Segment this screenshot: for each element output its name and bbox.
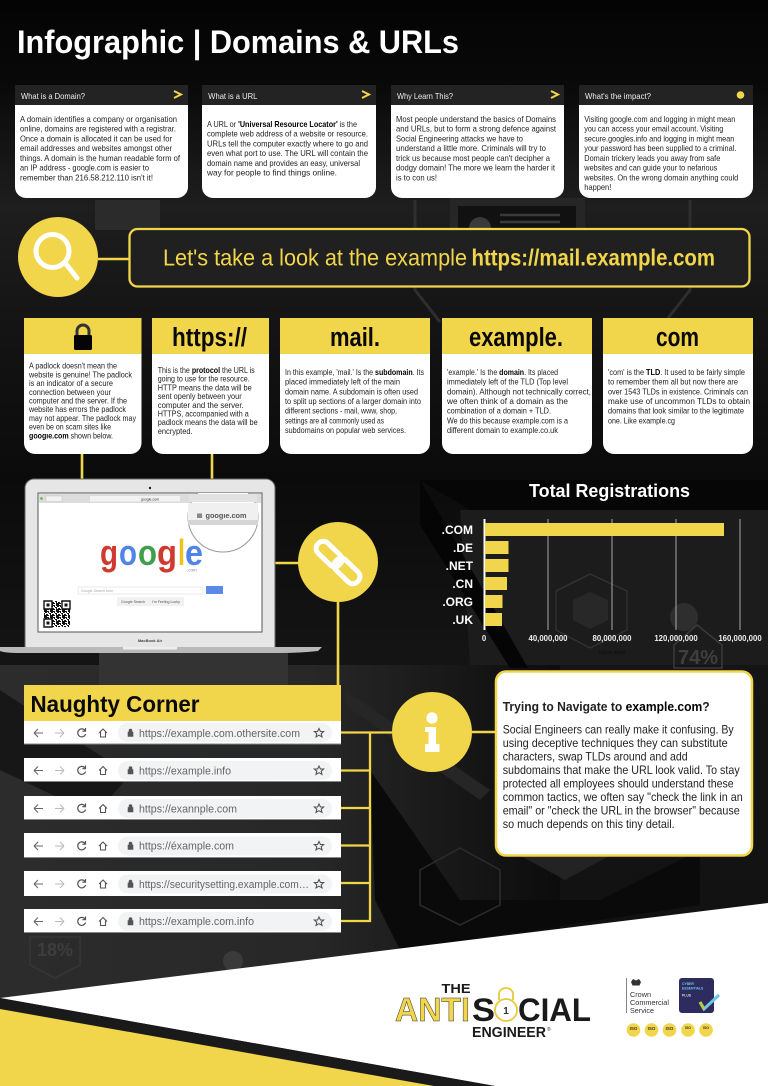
background: 18%: [37, 940, 73, 960]
panel: com TLD: over 1543 TLDs in existence. Criminals can: [608, 387, 748, 396]
bar chart: total registrations: 40,000,000: [528, 634, 568, 643]
heading: naughty corner: [24, 685, 341, 721]
logo: crown commercial service: [626, 978, 669, 1015]
panel: what is a domain: What is a Domain?: [21, 91, 85, 101]
google lookalike logo: o: [138, 532, 157, 573]
panel: why learn this: dodgy domain! The more we learn the harder it: [396, 163, 556, 173]
panel: com TLD: to remember them all but now there are: [608, 378, 739, 387]
panel: trying to navigate: subdomains that make the URL look valid. To stay: [503, 763, 740, 777]
icon: information: [392, 692, 472, 772]
search form: Google Search here: [81, 589, 113, 593]
bar chart: total registrations: .UK: [452, 613, 473, 627]
panel: trying to navigate: [496, 672, 752, 856]
panel: example domain: combination of a domain + TLD.: [447, 407, 551, 416]
badges: ISO certifications: ISO: [648, 1026, 656, 1031]
panel: trying to navigate: Trying to Navigate to example.com?: [503, 699, 710, 714]
badges: ISO certifications: ISO: [703, 1026, 709, 1030]
panel: https: HTTP means the data will be: [158, 383, 252, 392]
panel: why learn this: and URLs, but to form a strong defence against: [396, 124, 557, 134]
logo: crown commercial service: Crown: [630, 990, 651, 999]
panel: trying to navigate: using deceptive techniques they can substitute: [503, 736, 728, 750]
logo: the antisocial engineer: ANTI: [395, 991, 470, 1028]
panel: what is a URL: URLs tell the computer exactly where to go and: [207, 138, 368, 148]
bar chart: total registrations: .NET: [446, 559, 474, 573]
panel: trying to navigate: common tactics, we often say "check the link in an: [503, 790, 743, 804]
panel: example domain: 'example.' Is the domain. Its placed: [447, 368, 558, 377]
google lookalike logo: o: [119, 532, 137, 573]
browser bar 1: [24, 721, 341, 744]
laptop illustration: [0, 479, 322, 653]
panel: what is a domain: email addresses and websites amongst other: [20, 143, 172, 153]
search form: I'm Feeling Lucky: [152, 600, 180, 604]
logo: the antisocial engineer: THE: [442, 982, 470, 996]
panel: trying to navigate: characters, swap TLDs around and add: [503, 750, 688, 764]
bar chart: total registrations: 80,000,000: [592, 634, 632, 643]
panel: padlock: website is genuine! The padlock: [28, 370, 133, 379]
panel: example domain: We do this because example.com is a: [447, 416, 568, 425]
panel: what's the impact: secure.googles.info and logging in might mean: [584, 134, 735, 144]
panel: com TLD: one. Like example.cg: [608, 416, 675, 425]
panel: what's the impact: your password has been supplied to a criminal.: [584, 143, 736, 153]
panel: example domain: we often think of a domain as the: [446, 397, 569, 406]
bottom white and yellow footer shapes: [0, 903, 768, 1086]
browser toolbar: [39, 494, 261, 503]
google lookalike logo: l: [178, 532, 185, 573]
panel: what is a URL: domain name and provides an easy, universal: [207, 158, 360, 168]
badges: ISO certifications: [627, 1023, 713, 1037]
google lookalike logo: e: [185, 532, 203, 573]
panel: what's the impact: websites. On the wrong domain anything could: [583, 172, 739, 182]
panel: why learn this: trick us because most people can't decipher a: [396, 153, 550, 163]
panel: padlock: is an indicator of a secure: [29, 379, 113, 388]
callout: example URL: Let's take a look at the example: [163, 244, 467, 270]
panel: trying to navigate: Social Engineers can really make it confusing. By: [503, 722, 734, 736]
logo: the antisocial engineer: S: [472, 992, 495, 1028]
panel: https: padlock means the data will be: [158, 418, 258, 427]
panel: padlock: even be on scam sites like: [29, 423, 111, 432]
logo: crown commercial service: Service: [630, 1006, 654, 1015]
panel: com TLD: 'com' is the TLD. It used to be fairly simple: [608, 368, 745, 377]
panel: https: https://: [172, 324, 247, 352]
badge: cyber essentials plus: [679, 978, 719, 1013]
panel: what's the impact: What's the impact?: [585, 91, 651, 101]
panel: why learn this: Why Learn This?: [397, 91, 453, 101]
browser bar 5: [24, 871, 341, 896]
browser bar 1: https://example.com.othersite.com: [139, 728, 300, 740]
panel: padlock: A padlock doesn't mean the: [29, 362, 117, 371]
panel: what is a URL: What is a URL: [208, 91, 257, 101]
panel: what is a domain: an IP address - google.com is easier to: [20, 163, 149, 173]
panel: trying to navigate: protected all employees should understand these: [503, 776, 734, 790]
bar chart: total registrations: .ORG: [442, 595, 473, 609]
panel: mail subdomain: [280, 318, 430, 454]
google lookalike logo: .com: [187, 568, 197, 572]
panel: com TLD: com: [656, 324, 699, 352]
chart title: Total Registrations: [529, 480, 690, 501]
panel: why learn this: Social Engineering attacks we have to: [396, 134, 523, 144]
panel: what is a URL: complete web address of a website or resource.: [207, 129, 368, 139]
bar chart: total registrations: .DE: [453, 541, 473, 555]
logo: the antisocial engineer: ®: [547, 1026, 551, 1033]
panel: what is a URL: even what port to use. The URL will contain the: [207, 148, 368, 158]
panel: what's the impact: websites and can guide your to nefarious: [583, 163, 717, 173]
panel: com TLD: domains that look similar to the legitimate: [608, 407, 745, 416]
google lookalike logo: g: [157, 532, 177, 573]
logo: the antisocial engineer: [395, 982, 591, 1041]
panel: mail subdomain: domain name. A subdomain is often used: [285, 387, 418, 396]
browser bar 2: https://example.info: [139, 766, 231, 778]
QR code: [44, 601, 70, 627]
panel: what's the impact: Domain trickery leads you away from safe: [584, 153, 721, 163]
browser bar 4: [24, 833, 341, 858]
panel: mail subdomain: different sections - mail, www, shop,: [285, 407, 397, 416]
panel: https: going to use for the resource.: [158, 375, 250, 384]
callout: example URL: https://mail.example.com: [472, 244, 715, 270]
panel: what is a domain: Once a domain is allocated it can be used for: [20, 134, 172, 144]
icon: chain link: [298, 522, 378, 602]
icon: magnifying glass: [18, 217, 98, 297]
panel: what's the impact: you can access your email account. Visiting: [584, 124, 724, 134]
panel: padlock: may not appear. The padlock may: [29, 414, 136, 423]
callout: example URL: [130, 229, 750, 286]
panel: what's the impact: Visiting google.com and logging in might mean: [584, 114, 736, 124]
connector lines: [82, 259, 496, 922]
panel: com TLD: [603, 318, 753, 454]
browser bar 5: https://securitysetting.example.com…: [139, 879, 309, 891]
panel: mail subdomain: to split up sections of a larger domain into: [285, 397, 422, 406]
panel: https: HTTPS, accompanied with a: [158, 410, 249, 418]
panel: padlock: computer and the server. If the: [29, 396, 127, 406]
panel: https: This is the protocol the URL is: [158, 366, 255, 375]
panel: what is a domain: remember than 216.58.212.110 isn't it!: [20, 172, 153, 182]
search form: Google Search: [121, 600, 145, 604]
panel: example domain: [442, 318, 592, 454]
background: 74%: [678, 647, 718, 669]
panel: mail subdomain: In this example, 'mail.' Is the subdomain. Its: [285, 368, 424, 377]
panel: example domain: domain). Although not technically correct,: [447, 387, 591, 396]
icon: padlock: [74, 325, 92, 350]
panel: padlock: connection between your: [29, 388, 111, 397]
panel: trying to navigate: email" or "check the URL in the browser" because: [503, 804, 740, 818]
browser bar 4: https://éxample.com: [139, 840, 234, 852]
panel: mail subdomain: mail.: [330, 324, 380, 352]
browser bar 6: https://example.com.info: [139, 916, 254, 928]
panel: why learn this: Most people understand the basics of Domains: [396, 114, 556, 124]
magnified address bar: [188, 493, 258, 552]
badges: ISO certifications: ISO: [630, 1026, 638, 1031]
title: Infographic | Domains & URLs: [17, 24, 459, 60]
bar chart: total registrations: 0: [482, 634, 487, 643]
logo: the antisocial engineer: ENGINEER: [472, 1025, 547, 1041]
panel: what is a domain: A domain identifies a company or organisation: [20, 114, 177, 124]
browser toolbar: google.com: [141, 498, 159, 502]
panel: example domain: immediately left of the TLD (Top level: [447, 378, 568, 387]
panel: what is a domain: online, domains are registered with a registrar.: [20, 124, 176, 134]
panel: why learn this: understand a little more. Criminals will try to: [396, 143, 546, 153]
bar chart: total registrations: 120,000,000: [654, 634, 698, 643]
bar chart: total registrations: .CN: [452, 577, 473, 591]
panel: what is a URL: A URL or 'Universal Resource Locator' is the: [207, 119, 357, 129]
panel: example domain: example.: [469, 324, 563, 352]
badges: ISO certifications: ISO: [685, 1026, 691, 1030]
panel: padlock: website has errors the padlock: [28, 405, 127, 414]
bar chart: total registrations: 160,000,000: [718, 634, 762, 643]
padlock at-sign: 1: [503, 1006, 509, 1017]
browser bar 3: [24, 796, 341, 820]
browser bar 3: https://exannple.com: [139, 804, 237, 816]
panel: padlock: [24, 318, 142, 454]
panel: https: sent openly between your: [158, 392, 242, 401]
padlock at-sign: [495, 988, 517, 1021]
panel: example domain: different domain to example.co.uk: [447, 426, 559, 435]
panel: trying to navigate: so much depends on this tiny detail.: [503, 817, 675, 831]
panel: https: encrypted.: [158, 427, 193, 436]
search form: [78, 586, 223, 606]
logo: crown commercial service: Commercial: [630, 998, 669, 1007]
badge: cyber essentials plus: PLUS: [682, 994, 692, 998]
panel: what is a URL: way for people to find things online.: [206, 168, 337, 178]
laptop illustration: MacBook Air: [138, 638, 163, 643]
panel: what is a domain: things. A domain is the human readable form of: [20, 153, 181, 163]
magnified address bar: googıe.com: [206, 511, 247, 520]
badge: cyber essentials plus: CYBER: [682, 982, 694, 986]
panel: https: computer and the server.: [158, 401, 244, 410]
panel: what is a domain: [15, 85, 188, 198]
bar chart: total registrations: [442, 519, 762, 656]
panel: com TLD: make use of uncommon TLDs to obtain: [608, 397, 750, 406]
panel: what is a URL: [202, 85, 376, 198]
panel: mail subdomain: placed immediately left of the main: [285, 378, 400, 387]
panel: what's the impact: happen!: [584, 182, 611, 192]
logo: the antisocial engineer: CIAL: [518, 992, 591, 1028]
badge: cyber essentials plus: ESSENTIALS: [682, 986, 704, 990]
heading: naughty corner: Naughty Corner: [30, 691, 200, 717]
bar chart: total registrations: Value Axis: [598, 650, 626, 656]
browser bar 2: [24, 758, 341, 782]
panel: padlock: googıe.com shown below.: [29, 431, 113, 440]
google lookalike logo: g: [100, 532, 118, 573]
panel: why learn this: [391, 85, 564, 198]
panel: mail subdomain: subdomains on popular web services.: [285, 426, 406, 435]
panel: what's the impact: [579, 85, 753, 198]
panel: why learn this: is to con us!: [396, 172, 437, 182]
google lookalike logo: [100, 532, 203, 573]
panel: https: [152, 318, 269, 454]
panel: mail subdomain: settings are all commonly used as: [285, 416, 384, 425]
browser bar 6: [24, 909, 341, 933]
bar chart: total registrations: .COM: [442, 523, 473, 537]
badges: ISO certifications: ISO: [666, 1026, 674, 1031]
